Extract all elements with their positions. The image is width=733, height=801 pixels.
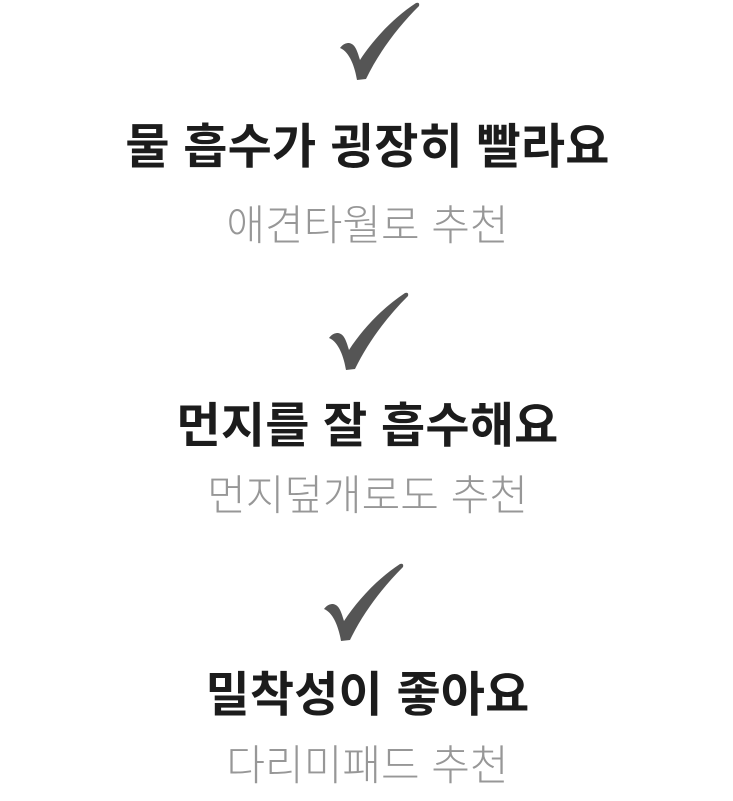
heading 2: 먼지를 잘 흡수해요 xyxy=(177,400,558,453)
icon: check mark 1 xyxy=(340,2,420,80)
icon: check mark 2 xyxy=(329,292,408,370)
heading 1: 물 흡수가 굉장히 빨라요 xyxy=(125,121,610,174)
icon: check mark 3 xyxy=(324,564,404,641)
subtext 1: 애견타월로 추천 xyxy=(226,202,509,249)
subtext 2: 먼지덮개로도 추천 xyxy=(207,472,528,519)
subtext 3: 다리미패드 추천 xyxy=(226,742,509,789)
heading 3: 밀착성이 좋아요 xyxy=(205,669,530,722)
